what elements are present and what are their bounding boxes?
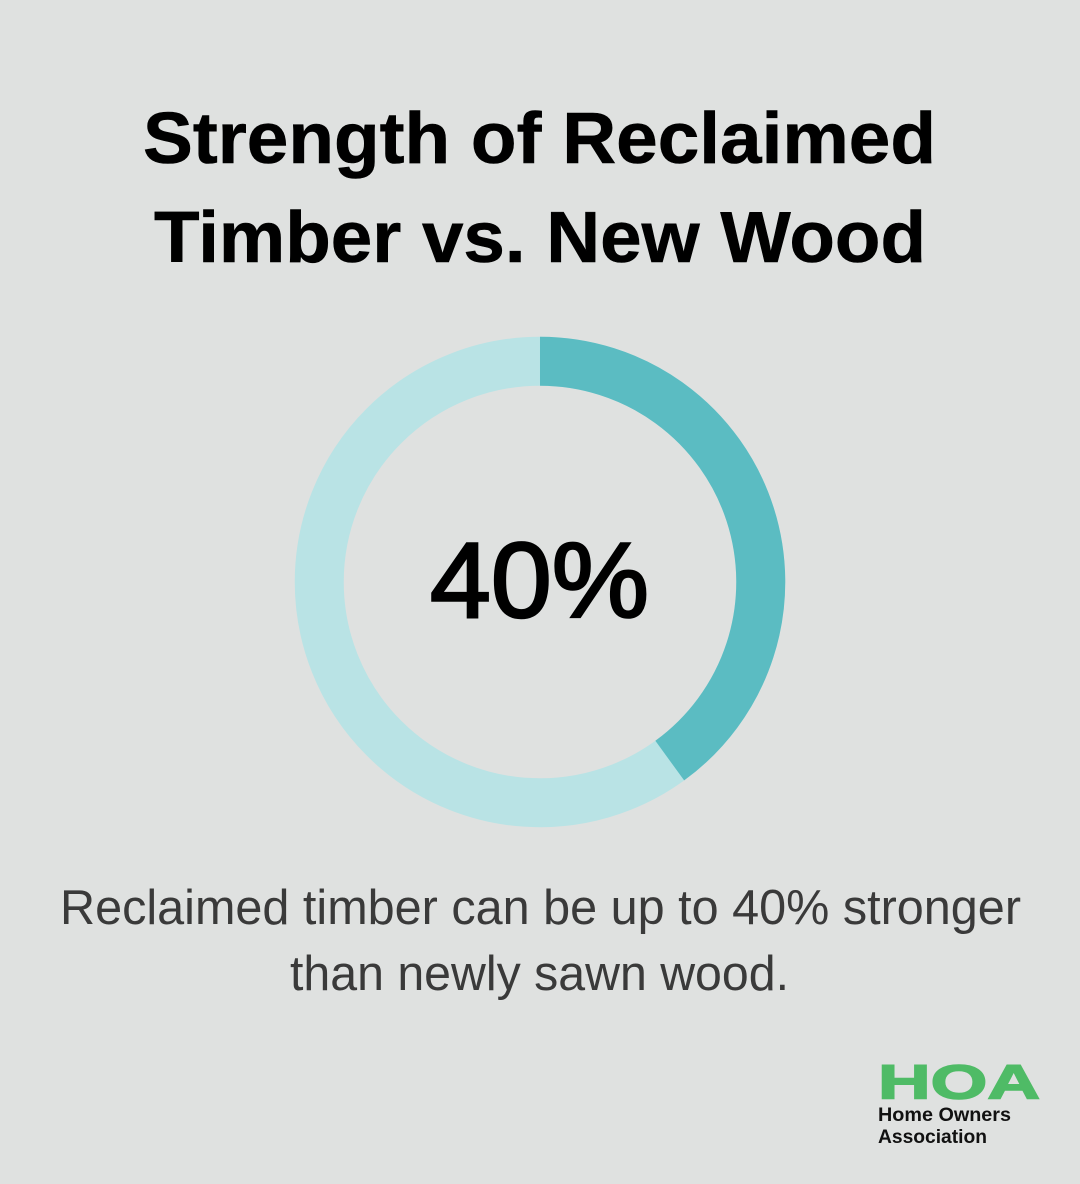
logo: HOA Home Owners Association — [878, 1056, 1040, 1148]
logo name — [878, 1105, 1011, 1148]
description text: than newly sawn wood. — [290, 947, 789, 1001]
logo name: Association — [878, 1127, 987, 1148]
donut value: 40% — [430, 520, 649, 640]
title — [143, 99, 936, 278]
description text — [60, 881, 1021, 1001]
logo name: Home Owners — [878, 1105, 1011, 1126]
donut chart: 40% — [319, 361, 761, 803]
title: Timber vs. New Wood — [154, 198, 926, 278]
logo mark: HOA — [878, 1056, 1040, 1110]
title: Strength of Reclaimed — [143, 99, 936, 179]
description text: Reclaimed timber can be up to 40% stronger — [60, 881, 1021, 935]
